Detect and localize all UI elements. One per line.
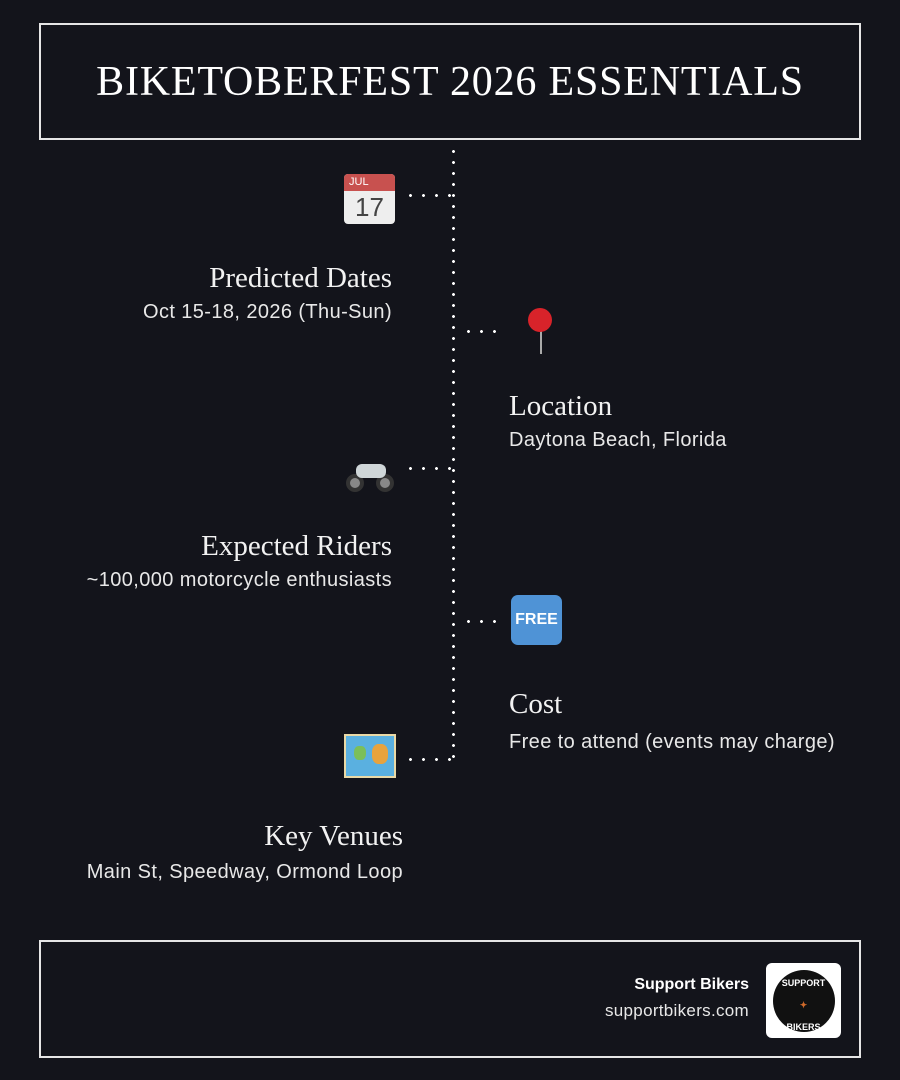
block: cost: Cost [509,688,562,720]
block: predicted dates: Predicted Dates [209,262,392,294]
icon: free: FREE [515,611,558,628]
icon: pin [528,308,552,354]
block: expected riders: ~100,000 motorcycle enthusiasts [87,569,392,591]
logo: ✦ [800,1000,807,1010]
block: predicted dates: Oct 15-18, 2026 (Thu-Sun) [143,301,392,323]
footer text: Support Bikers [634,976,749,993]
title box [39,23,861,140]
title: BIKETOBERFEST 2026 ESSENTIALS [96,58,804,104]
icon: calendar [344,174,395,224]
footer text [605,976,749,1020]
icon: calendar: JUL [349,176,369,188]
timeline line [452,146,455,762]
icon: free [511,595,562,645]
block: location [509,390,727,451]
block: cost: Free to attend (events may charge) [509,731,835,753]
logo: BIKERS [786,1022,820,1032]
footer [39,940,861,1058]
block: expected riders [87,530,392,591]
connector dots [404,194,454,197]
icon: motorcycle [346,464,394,492]
block: key venues: Main St, Speedway, Ormond Loop [87,861,403,883]
block: location: Location [509,390,612,422]
block: key venues: Key Venues [264,820,403,852]
block: location: Daytona Beach, Florida [509,429,727,451]
footer text: supportbikers.com [605,1001,749,1020]
logo: SUPPORT [782,978,825,988]
block: cost [509,688,835,753]
icon: calendar: 17 [355,192,384,222]
logo [766,963,841,1038]
block: predicted dates [143,262,392,323]
icon: map [344,734,396,778]
block: expected riders: Expected Riders [201,530,392,562]
block: key venues [87,820,403,883]
